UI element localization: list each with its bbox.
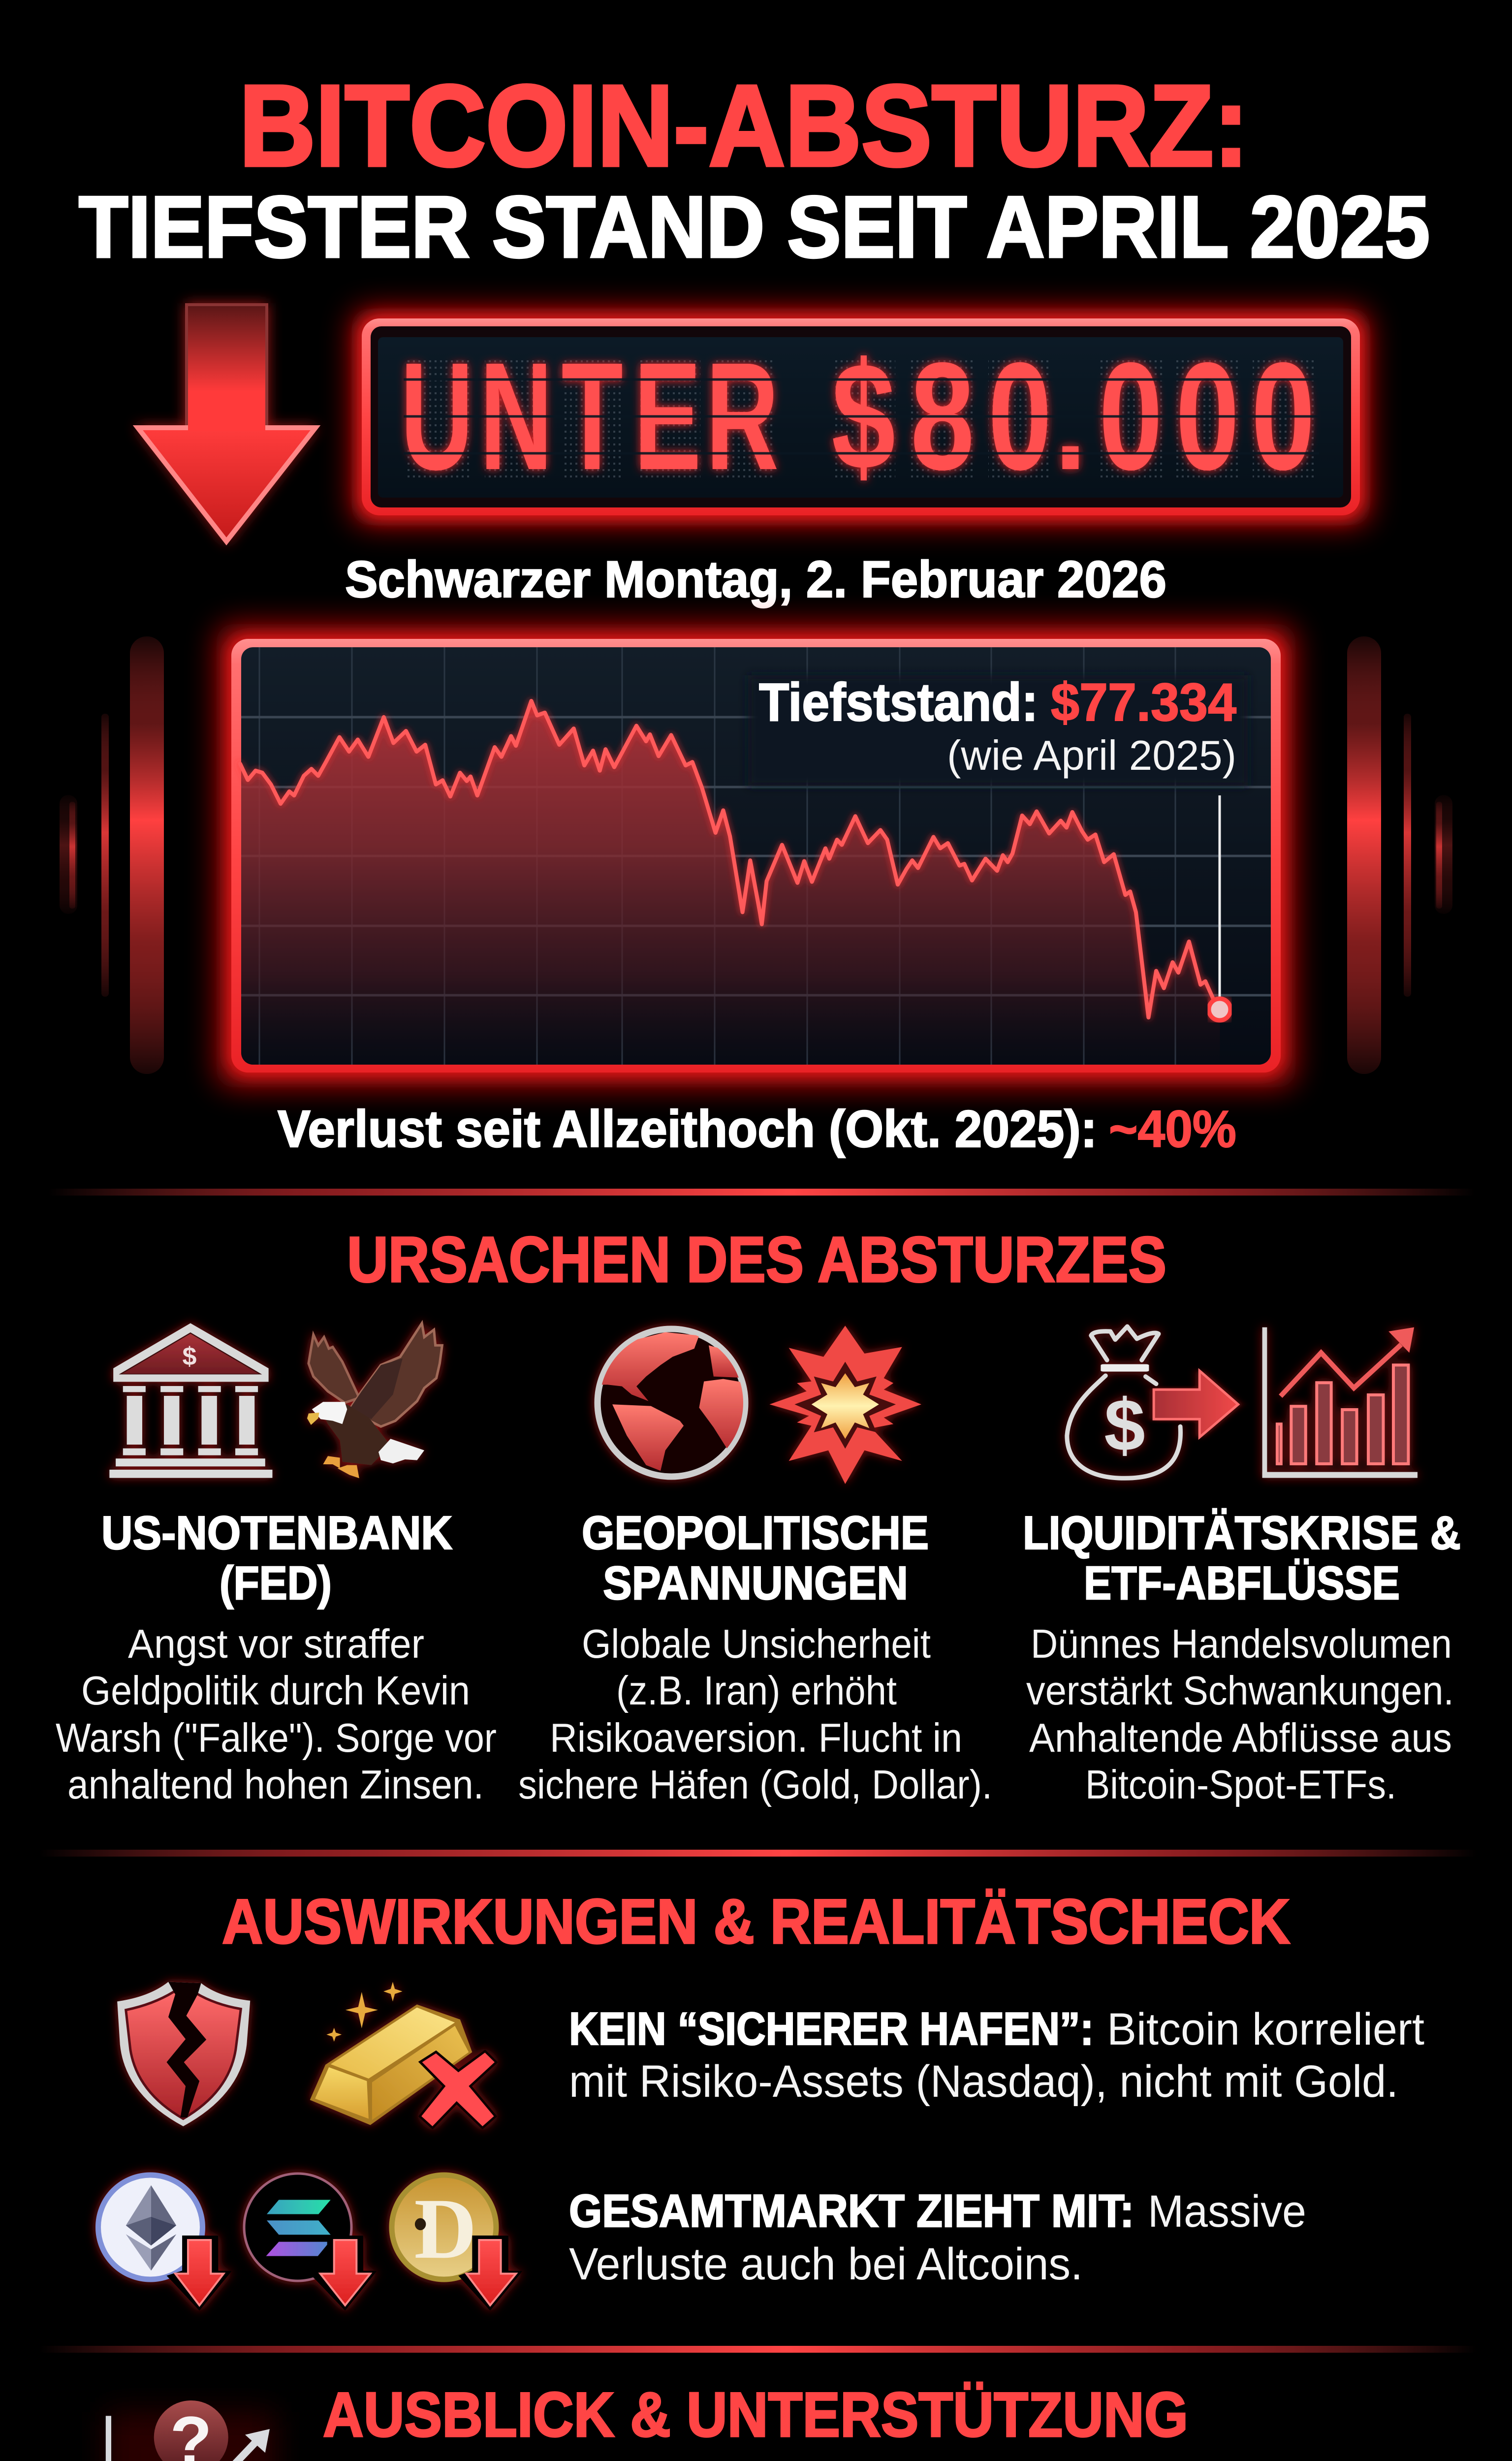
low marker line	[1219, 795, 1221, 999]
panel: price display	[352, 309, 1370, 525]
icon: explosion	[769, 1325, 921, 1484]
panel: cause 2 geopolitics	[518, 1325, 992, 1807]
icon: ethereum coin	[98, 2175, 232, 2311]
panel: impact icons row 2	[98, 2174, 523, 2311]
cause 2 text: Risikoaversion. Flucht in	[550, 1715, 962, 1761]
panel: cause 1 fed	[56, 1323, 497, 1807]
loss summary: Verlust seit Allzeithoch (Okt. 2025):	[278, 1100, 1097, 1158]
price text	[401, 330, 1315, 502]
impact text 1: KEIN “SICHERER HAFEN”:	[569, 2003, 1094, 2054]
cause 2 title	[582, 1507, 929, 1609]
low price label	[759, 672, 1236, 779]
icon: gold bar with cross	[310, 1982, 495, 2126]
loss summary: ~40%	[1109, 1100, 1236, 1158]
low marker dot	[1209, 999, 1230, 1020]
cause 2 text: Globale Unsicherheit	[582, 1621, 931, 1667]
impact text 1	[569, 2003, 1424, 2107]
icon: dogecoin	[392, 2175, 523, 2311]
date line: Schwarzer Montag, 2. Februar 2026	[345, 551, 1166, 608]
panel: cause 3 liquidity	[1023, 1326, 1461, 1807]
cause 3 text: verstärkt Schwankungen.	[1026, 1668, 1454, 1713]
side light bars: left	[60, 636, 164, 1074]
price text: UNTER	[401, 330, 779, 502]
cause 1 title	[101, 1507, 452, 1609]
cause 3 text	[1026, 1621, 1454, 1807]
icon: solana coin	[244, 2174, 377, 2311]
title line 1: BITCOIN-ABSTURZ:	[239, 61, 1249, 190]
impact text 2: GESAMTMARKT ZIEHT MIT:	[569, 2185, 1134, 2237]
impact text 2: Verluste auch bei Altcoins.	[569, 2239, 1083, 2289]
price text: $80.000	[831, 331, 1315, 502]
impact text 2	[569, 2185, 1306, 2289]
icon: eagle	[307, 1323, 442, 1478]
icon: bar chart	[1262, 1327, 1418, 1478]
cause 1 text: Geldpolitik durch Kevin	[81, 1668, 470, 1713]
heading: causes: URSACHEN DES ABSTURZES	[347, 1223, 1166, 1295]
cause 3 title: LIQUIDITÄTSKRISE &	[1023, 1507, 1461, 1559]
cause 1 text: Angst vor straffer	[128, 1621, 424, 1667]
heading: impact: AUSWIRKUNGEN & REALITÄTSCHECK	[222, 1887, 1290, 1957]
icon: chart with question mark	[106, 2400, 277, 2461]
icon: money bag	[1067, 1326, 1181, 1478]
side light bars: right	[1347, 636, 1452, 1074]
low price label: (wie April 2025)	[947, 732, 1236, 779]
panel: outlook	[106, 2380, 1398, 2461]
icon: big down arrow	[135, 303, 318, 544]
cause 3 title: ETF-ABFLÜSSE	[1084, 1557, 1400, 1609]
impact text 1: mit Risiko-Assets (Nasdaq), nicht mit Gold.	[569, 2056, 1398, 2107]
impact text 1: Bitcoin korreliert	[1107, 2004, 1424, 2054]
heading: outlook: AUSBLICK & UNTERSTÜTZUNG	[323, 2380, 1188, 2450]
low price label: Tiefststand:	[759, 672, 1038, 732]
panel: impact icons row 1	[117, 1982, 495, 2126]
cause 1 text: anhaltend hohen Zinsen.	[67, 1762, 484, 1807]
cause 3 text: Bitcoin-Spot-ETFs.	[1085, 1762, 1396, 1807]
cause 2 title: GEOPOLITISCHE	[582, 1507, 929, 1559]
icon: outflow arrow	[1154, 1371, 1238, 1437]
cause 1 title: (FED)	[220, 1557, 332, 1609]
cause 2 text: sichere Häfen (Gold, Dollar).	[518, 1762, 992, 1807]
cause 3 text: Anhaltende Abflüsse aus	[1029, 1715, 1452, 1761]
cause 2 text: (z.B. Iran) erhöht	[616, 1668, 897, 1713]
cause 1 text	[56, 1621, 497, 1807]
cause 2 title: SPANNUNGEN	[603, 1557, 908, 1609]
cause 3 text: Dünnes Handelsvolumen	[1031, 1621, 1452, 1667]
cause 1 text: Warsh ("Falke"). Sorge vor	[56, 1715, 497, 1761]
impact text 2: Massive	[1148, 2186, 1306, 2237]
title	[79, 61, 1430, 276]
icon: globe	[596, 1329, 757, 1477]
icon: central bank	[109, 1323, 272, 1478]
chart price line	[240, 701, 1220, 1017]
chart area fill	[240, 701, 1220, 1065]
icon: money bag: $	[1104, 1384, 1145, 1466]
cause 2 text	[518, 1621, 992, 1807]
icon: dogecoin: D	[414, 2181, 477, 2277]
cause 1 title: US-NOTENBANK	[101, 1507, 452, 1559]
title line 2: TIEFSTER STAND SEIT APRIL 2025	[79, 178, 1430, 276]
icon: central bank: $	[183, 1342, 197, 1371]
panel: price chart	[217, 624, 1295, 1087]
icon: broken shield	[117, 1982, 250, 2126]
low price label: $77.334	[1051, 672, 1236, 732]
cause 3 title	[1023, 1507, 1461, 1609]
